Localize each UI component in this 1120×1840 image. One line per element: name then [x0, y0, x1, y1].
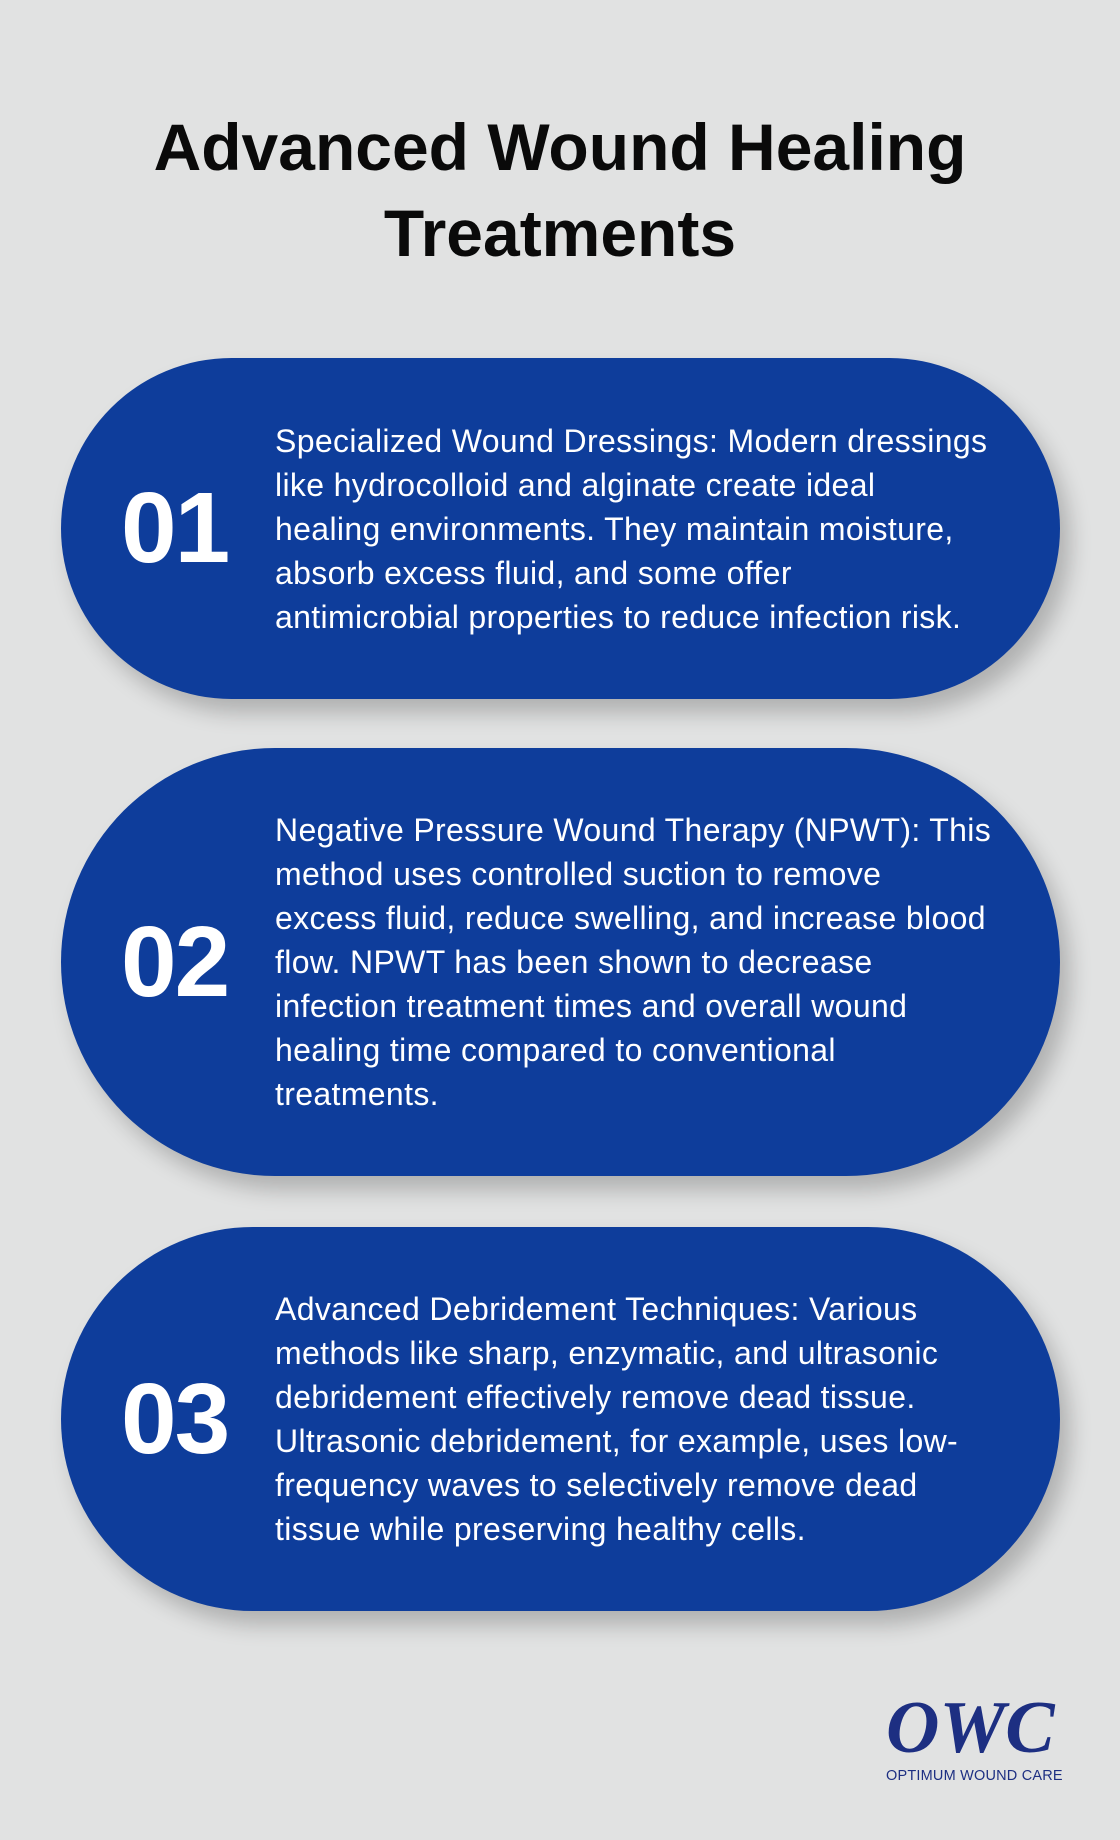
text 03: methods like sharp, enzymatic, and ultrasonic: [275, 1335, 938, 1371]
title: [154, 110, 966, 270]
text 01: absorb excess fluid, and some offer: [275, 554, 792, 590]
panel: 01: [61, 358, 1060, 699]
text 02: Negative Pressure Wound Therapy (NPWT): This: [275, 812, 991, 848]
number 02: 02: [121, 906, 228, 1018]
text 02: method uses controlled suction to remove: [275, 856, 881, 892]
number 01: 01: [121, 472, 228, 584]
text 03: Ultrasonic debridement, for example, uses low-: [275, 1423, 958, 1459]
title: Advanced Wound Healing: [154, 110, 966, 184]
title: Treatments: [384, 196, 736, 270]
text 02: infection treatment times and overall wound: [275, 988, 907, 1024]
panel: 02: [61, 748, 1060, 1176]
text 02: healing time compared to conventional: [275, 1032, 836, 1068]
panel: 03: [61, 1227, 1060, 1611]
text 01: antimicrobial properties to reduce infection risk.: [275, 598, 961, 634]
number 03: 03: [121, 1362, 228, 1474]
text 03: [275, 1291, 958, 1547]
text 03: tissue while preserving healthy cells.: [275, 1511, 806, 1547]
text 01: Specialized Wound Dressings: Modern dressings: [275, 422, 987, 458]
text 02: [275, 812, 991, 1112]
text 03: debridement effectively remove dead tissue.: [275, 1379, 916, 1415]
text 02: treatments.: [275, 1076, 439, 1112]
text 03: frequency waves to selectively remove dead: [275, 1467, 918, 1503]
text 01: healing environments. They maintain moisture,: [275, 510, 954, 546]
text 01: like hydrocolloid and alginate create ideal: [275, 466, 875, 502]
text 03: Advanced Debridement Techniques: Various: [275, 1291, 918, 1327]
text 01: [275, 422, 987, 634]
text 02: flow. NPWT has been shown to decrease: [275, 944, 873, 980]
logo: OPTIMUM WOUND CARE: [886, 1768, 1063, 1784]
logo: OWC: [886, 1687, 1055, 1769]
text 02: excess fluid, reduce swelling, and increase blood: [275, 900, 986, 936]
